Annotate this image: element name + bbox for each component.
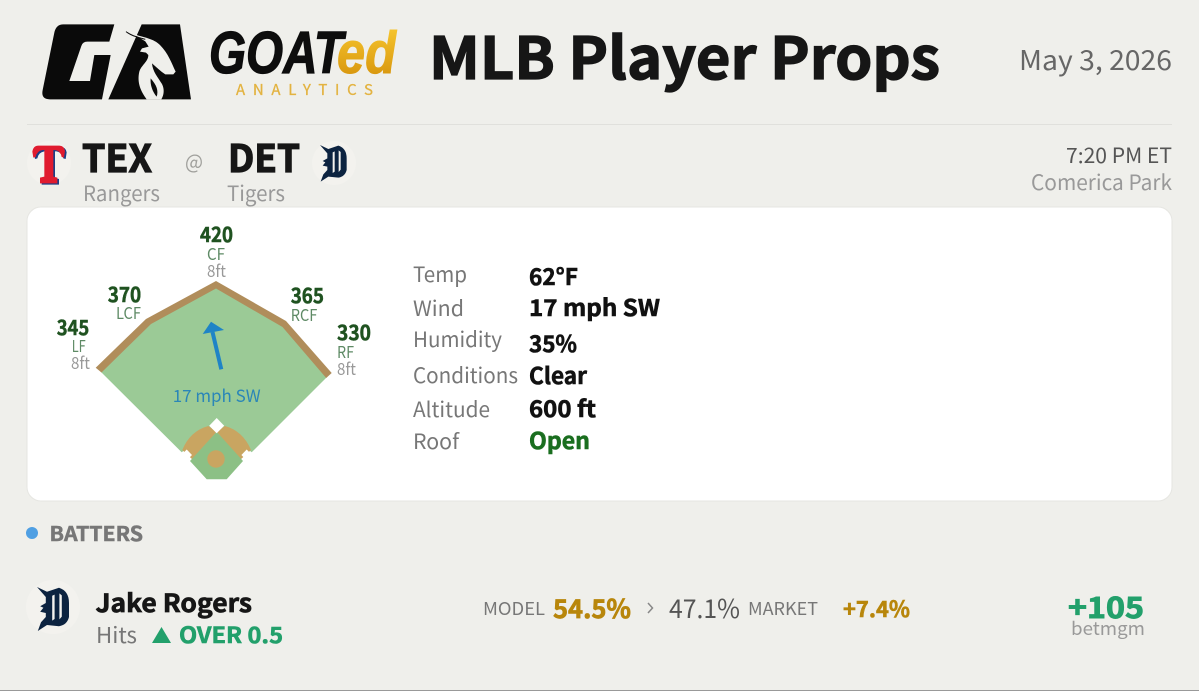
icon: Rangers logo <box>27 141 71 185</box>
chart: ballpark diagram <box>57 218 371 479</box>
label: RCF: 365 <box>291 279 324 309</box>
infield dirt <box>182 426 251 460</box>
wind arrow <box>203 322 224 369</box>
icon: Tigers logo <box>312 141 356 185</box>
weather row: roof: Roof <box>413 426 460 456</box>
label: LF: LF <box>72 333 86 357</box>
team: DET: DET <box>228 128 300 183</box>
weather table <box>413 258 660 456</box>
weather row: humidity: 35% <box>529 325 577 359</box>
icon: up triangle <box>152 627 171 643</box>
label: LCF: 370 <box>108 278 141 308</box>
label: CF: CF <box>207 241 225 265</box>
odds: +105 <box>1068 585 1144 627</box>
market probability: 47.1% <box>669 589 740 626</box>
title: MLB Player Props <box>429 12 940 96</box>
team: TEX: TEX <box>82 128 152 183</box>
player name: Jake Rogers <box>96 584 252 620</box>
label: CF: 8ft <box>207 258 226 282</box>
weather row: wind: 17 mph SW <box>529 289 660 323</box>
prop market: Hits <box>96 618 137 650</box>
wind label: 17 mph SW <box>173 382 261 407</box>
field grass <box>99 284 329 452</box>
section heading: batters: BATTERS <box>50 518 143 547</box>
logo: GOATed wordmark: ed <box>337 20 398 86</box>
label: RF <box>337 316 371 380</box>
team: DET: Tigers <box>227 178 285 208</box>
prop row: Jake Rogers <box>26 580 1145 650</box>
market label: MARKET <box>748 595 818 621</box>
weather row: altitude: Altitude <box>413 394 490 424</box>
logo: GOATed wordmark: GOAT <box>209 20 347 86</box>
label: CF: 420 <box>200 218 233 248</box>
chevron <box>648 603 652 613</box>
prop line: OVER 0.5 <box>179 618 283 650</box>
model label: MODEL <box>483 595 545 621</box>
sportsbook: betmgm <box>1071 615 1145 641</box>
logo: GOATed wordmark: ANALYTICS <box>236 79 373 100</box>
weather row: temp <box>413 258 578 292</box>
model probability: 54.5% <box>553 589 631 626</box>
date: May 3, 2026 <box>1019 39 1172 78</box>
label: RCF <box>291 279 324 326</box>
weather row: wind <box>413 289 660 323</box>
weather row: conditions: Conditions <box>413 360 518 390</box>
game time: 7:20 PM ET <box>1066 140 1172 170</box>
weather row: conditions <box>413 357 588 391</box>
label: LCF: LCF <box>116 300 141 324</box>
pitcher mound <box>207 450 225 468</box>
venue: Comerica Park <box>1031 167 1172 197</box>
label: CF <box>200 218 233 282</box>
weather row: conditions: Clear <box>529 357 588 391</box>
weather row: altitude: 600 ft <box>529 390 596 424</box>
label: RF: 330 <box>337 316 371 346</box>
weather row: roof: Open <box>529 422 590 456</box>
edge: +7.4% <box>843 592 910 624</box>
bases <box>181 418 252 460</box>
label: LF <box>57 311 90 374</box>
weather row: roof <box>413 422 590 456</box>
infield grass <box>190 432 243 479</box>
label: LF: 345 <box>57 311 89 341</box>
team: DET <box>227 128 300 208</box>
label: LF: 8ft <box>71 350 90 374</box>
weather row: temp: 62°F <box>529 258 578 292</box>
weather row: temp: Temp <box>413 259 467 289</box>
label: RCF: RCF <box>291 302 317 326</box>
weather row: wind: Wind <box>413 293 464 323</box>
icon: Tigers logo <box>26 580 80 634</box>
label: LCF <box>108 278 141 324</box>
team: TEX <box>82 128 160 208</box>
weather row: humidity: Humidity <box>413 324 502 354</box>
logo: GA goat mark <box>42 24 191 99</box>
label: RF: RF <box>337 339 354 363</box>
label: RF: 8ft <box>337 356 356 380</box>
team: TEX: Rangers <box>83 178 160 208</box>
at symbol: @ <box>185 146 203 175</box>
weather row: humidity <box>413 324 577 359</box>
weather row: altitude <box>413 390 596 424</box>
outfield wall <box>96 281 332 378</box>
panel: ballpark and weather card <box>27 207 1172 501</box>
